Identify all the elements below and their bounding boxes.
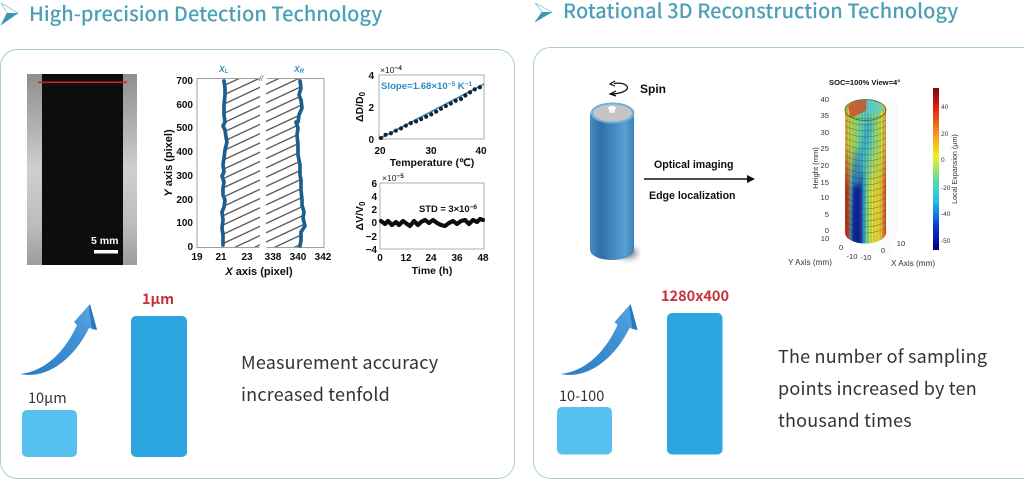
edge position chart: R [300, 69, 305, 75]
edge position chart: 0 [187, 242, 193, 253]
volume stability chart: 24 [425, 253, 437, 264]
bar: before [22, 410, 77, 457]
bar: before [557, 407, 612, 454]
edge position chart: X axis (pixel) [224, 266, 293, 278]
edge position chart: 19 [191, 252, 203, 263]
edge position chart: 340 [290, 252, 307, 263]
caption: sampling: The number of sampling [778, 343, 987, 369]
3D expansion map: -10 [861, 253, 871, 262]
colour scale: -50 [941, 238, 951, 245]
growth arrow [560, 304, 638, 375]
3D expansion map: 15 [821, 178, 829, 187]
battery edge photo: 5 mm [91, 235, 118, 247]
edge position chart: // [258, 76, 264, 83]
edge position chart: 338 [265, 252, 282, 263]
value label: before: 10-100 [559, 385, 604, 406]
temperature chart: 30 [425, 146, 437, 157]
volume stability chart: STD = 3×10 [419, 203, 470, 214]
volume stability chart: 4 [371, 192, 377, 203]
3D expansion map: 35 [821, 111, 829, 120]
3D expansion map: 0 [839, 243, 843, 252]
volume stability chart: 36 [451, 253, 463, 264]
temperature chart: Temperature (℃) [390, 157, 474, 169]
colour scale: -40 [941, 211, 951, 218]
volume stability chart: 6 [371, 179, 377, 190]
temperature chart: −1 [465, 81, 472, 88]
temperature chart: 0 [368, 135, 374, 146]
3D expansion map: SOC=100% View=4° [829, 78, 900, 87]
3D expansion map: Y Axis (mm) [788, 258, 832, 267]
temperature chart: 0 [358, 91, 367, 96]
volume stability chart: −2 [366, 232, 377, 243]
spin arrow and label [610, 81, 666, 96]
3D expansion map: -10 [847, 252, 857, 261]
process arrow and labels: Edge localization [649, 190, 736, 202]
volume stability chart: 2 [371, 205, 377, 216]
caption: accuracy: Measurement accuracy [241, 349, 439, 375]
edge position chart: L [225, 69, 229, 75]
bar: after [131, 316, 187, 457]
3D expansion map: 40 [821, 95, 829, 104]
volume stability chart: −5 [396, 173, 404, 180]
volume stability chart: 0 [371, 218, 377, 229]
3D expansion map: 30 [821, 128, 829, 137]
edge position chart: Y axis (pixel) [163, 129, 175, 197]
temperature chart: ×10 [380, 65, 394, 75]
value label: 10 micrometres: 10μm [28, 387, 67, 408]
3D expansion map: 10 [821, 234, 829, 243]
volume stability chart: 48 [477, 253, 489, 264]
3D expansion map: Height (mm) [811, 147, 820, 189]
volume stability chart: 0 [377, 253, 383, 264]
value label: after: 1280x400 [661, 285, 729, 306]
edge position chart: 342 [315, 252, 332, 263]
temperature chart: 2 [368, 103, 374, 114]
growth arrow [20, 304, 97, 375]
edge position chart: 200 [176, 195, 193, 206]
temperature chart: Slope=1.68×10 [381, 81, 448, 92]
volume stability chart: 0 [358, 201, 367, 206]
edge position chart [163, 64, 332, 278]
caption: sampling: points increased by ten [778, 375, 977, 401]
edge position chart: 400 [176, 147, 193, 158]
process arrow and labels [644, 159, 755, 202]
edge position chart: 300 [176, 171, 193, 182]
colour scale: 0 [941, 157, 945, 164]
3D expansion map: X Axis (mm) [891, 259, 935, 268]
edge position chart: X [219, 64, 225, 74]
3D expansion map: 0 [825, 226, 829, 235]
bar: after [667, 313, 722, 454]
edge position chart: 21 [215, 252, 227, 263]
3D expansion map [788, 78, 935, 268]
colour scale: -20 [941, 185, 951, 192]
3D expansion map: 20 [821, 161, 829, 170]
3D expansion map: 5 [825, 210, 829, 219]
edge position chart: 600 [176, 100, 193, 111]
volume stability chart [354, 173, 489, 277]
temperature chart: K [455, 81, 465, 92]
battery cylinder [590, 102, 638, 260]
volume stability chart: Time (h) [412, 265, 452, 277]
volume stability chart: ×10 [382, 173, 396, 183]
caption: accuracy: increased tenfold [241, 381, 390, 407]
temperature chart: ΔD/D [354, 96, 366, 122]
colour scale: 20 [941, 131, 949, 138]
3D expansion map: 25 [821, 144, 829, 153]
volume stability chart: −4 [366, 245, 377, 256]
temperature chart: 4 [368, 71, 374, 82]
colour scale [933, 88, 959, 250]
3D expansion map: 10 [897, 239, 905, 248]
3D expansion map: 0 [881, 246, 885, 255]
colour scale: 40 [941, 104, 949, 111]
volume stability chart: 12 [400, 253, 412, 264]
3D expansion map: 10 [821, 193, 829, 202]
volume stability chart: ΔV/V [354, 206, 366, 230]
edge position chart: 23 [241, 252, 253, 263]
panel: detection [0, 50, 514, 478]
edge position chart: 100 [176, 218, 193, 229]
edge position chart: 700 [176, 76, 193, 87]
edge position chart: X [294, 64, 300, 74]
temperature chart [354, 65, 487, 169]
battery edge photo [27, 74, 137, 265]
temperature chart: 40 [475, 146, 487, 157]
volume stability chart: −6 [470, 204, 477, 211]
temperature chart: 20 [374, 146, 386, 157]
temperature chart: −4 [394, 65, 402, 72]
edge position chart: 500 [176, 123, 193, 134]
value label: 1 micrometre: 1μm [142, 288, 174, 309]
process arrow and labels: Optical imaging [654, 159, 733, 171]
panel: reconstruction [534, 48, 1024, 478]
spin arrow and label: Spin [640, 82, 666, 96]
caption: sampling: thousand times [778, 407, 912, 433]
colour scale: Local Expansion (μm) [950, 134, 959, 204]
temperature chart: −5 [448, 81, 455, 88]
